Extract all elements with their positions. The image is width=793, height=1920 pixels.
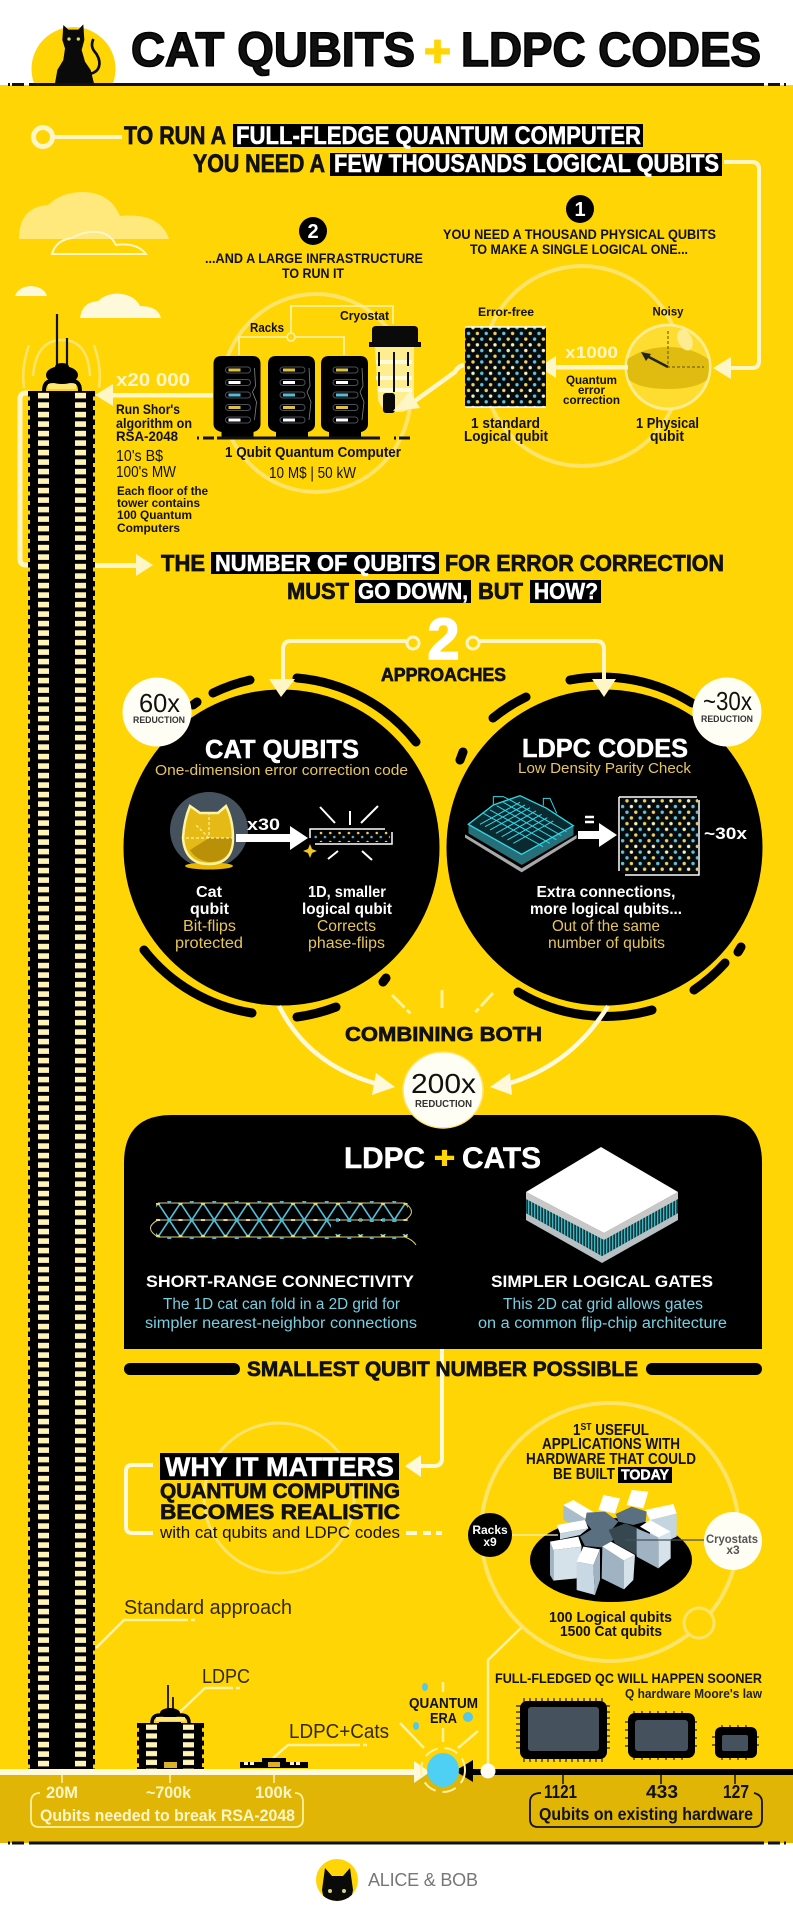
tower notes: Run Shor's bbox=[116, 401, 180, 417]
heading: intro: FEW THOUSANDS LOGICAL QUBITS bbox=[334, 150, 719, 178]
callout: standard approach bbox=[96, 1597, 292, 1648]
badge: 60x: 60x bbox=[139, 688, 180, 718]
heading: question: THE bbox=[161, 550, 205, 576]
text: simpler logical gates: on a common flip-chip architecture bbox=[478, 1315, 727, 1332]
computer caption: 10 M$ | 50 kW bbox=[269, 465, 357, 482]
title: CAT QUBITS bbox=[131, 24, 415, 77]
hardware caption bbox=[549, 1609, 672, 1640]
2 approaches: 2 bbox=[427, 607, 460, 672]
outlined cloud bbox=[52, 232, 146, 254]
badge: 200x: REDUCTION bbox=[415, 1099, 472, 1110]
heading: + bbox=[434, 1142, 455, 1175]
qubit count labels: ~700k bbox=[146, 1783, 192, 1802]
title: LDPC CODES bbox=[461, 24, 761, 77]
cat qubit caption: protected bbox=[175, 935, 243, 952]
full-fledged heading: FULL-FLEDGED QC WILL HAPPEN SOONER bbox=[495, 1670, 762, 1686]
graphic: flip-chip bbox=[526, 1147, 678, 1263]
why it matters bbox=[126, 1452, 442, 1542]
heading: question: FOR ERROR CORRECTION bbox=[445, 550, 724, 576]
text: short-range connectivity: simpler nearest-neighbor connections bbox=[145, 1315, 417, 1332]
footer logo: ALICE & BOB bbox=[368, 1870, 478, 1890]
text: short-range connectivity: The 1D cat can fold in a 2D grid for bbox=[163, 1296, 400, 1313]
building: LDPC tower bbox=[137, 1685, 204, 1769]
label: quantum error correction: correction bbox=[563, 393, 620, 407]
step 1 text: YOU NEED A THOUSAND PHYSICAL QUBITS bbox=[443, 227, 716, 242]
cat qubit caption: qubit bbox=[190, 901, 230, 918]
callout: LDPC bbox=[180, 1666, 250, 1712]
badge: 30x: REDUCTION bbox=[701, 714, 753, 725]
illustration: 9 rack hexagon array bbox=[512, 1490, 704, 1602]
callout: LDPC: LDPC bbox=[202, 1666, 250, 1688]
step 2 text: TO RUN IT bbox=[282, 266, 345, 281]
tower notes bbox=[116, 370, 208, 535]
computer caption: 1 Qubit Quantum Computer bbox=[225, 445, 401, 461]
badge: 60x: REDUCTION bbox=[133, 715, 185, 726]
cat qubit caption bbox=[175, 884, 243, 952]
title bbox=[131, 24, 761, 77]
heading: CATS bbox=[462, 1142, 541, 1175]
standard logical qubit: Logical qubit bbox=[464, 429, 548, 445]
badge: 30x: ~30x bbox=[703, 686, 752, 716]
step 2 text: 2 bbox=[307, 221, 319, 243]
arrow: x30 bbox=[236, 815, 308, 850]
panel: LDPC + Cats bbox=[124, 1115, 762, 1349]
heading: LDPC CODES bbox=[522, 733, 688, 763]
physical qubit: qubit bbox=[650, 429, 684, 445]
heading: question: BUT bbox=[478, 578, 523, 604]
computer caption bbox=[225, 445, 401, 482]
quantum era bbox=[400, 1682, 478, 1792]
badge: cryostats x3: Cryostats bbox=[706, 1532, 758, 1546]
arrow left bbox=[269, 637, 419, 697]
icon: 1D logical qubit bbox=[303, 806, 392, 860]
tower notes: Computers bbox=[117, 521, 180, 535]
LDPC caption bbox=[530, 884, 682, 952]
building: LDPC+Cats bbox=[240, 1758, 308, 1768]
arrow: x30: x30 bbox=[247, 815, 280, 834]
standard logical qubit: 1 standard bbox=[471, 416, 540, 432]
arrow: x1000 bbox=[539, 343, 628, 378]
label: quantum error correction bbox=[563, 373, 620, 407]
racks bbox=[197, 306, 410, 438]
left connector line bbox=[20, 393, 30, 565]
why it matters: QUANTUM COMPUTING bbox=[160, 1480, 400, 1503]
tower notes: algorithm on bbox=[116, 415, 192, 431]
title: + bbox=[424, 27, 451, 76]
heading: CAT QUBITS bbox=[205, 734, 359, 764]
badge: 60x bbox=[122, 678, 192, 746]
pale cloud bbox=[19, 192, 169, 239]
1st useful applications text: BE BUILT bbox=[553, 1466, 615, 1483]
pale circle: hardware bbox=[481, 1403, 739, 1661]
LDPC caption: number of qubits bbox=[548, 935, 665, 952]
icon: cat qubit bbox=[170, 792, 248, 870]
2 approaches: APPROACHES bbox=[381, 664, 506, 685]
subtitle: One-dimension error correction code bbox=[155, 763, 408, 779]
badge: cryostats x3 bbox=[704, 1512, 762, 1570]
badge: racks x9: x9 bbox=[483, 1535, 497, 1549]
arrow: logical qubit to computer bbox=[393, 365, 464, 411]
standard logical qubit bbox=[464, 305, 548, 445]
physical qubit bbox=[624, 306, 712, 444]
physical qubit: Noisy bbox=[652, 304, 684, 318]
arrow: equals bbox=[578, 817, 617, 847]
heading: question bbox=[161, 550, 724, 604]
why it matters: BECOMES REALISTIC bbox=[160, 1501, 400, 1524]
tower notes: Each floor of the bbox=[117, 484, 208, 498]
heading: question: GO DOWN, bbox=[358, 578, 468, 604]
tower notes: RSA-2048 bbox=[116, 428, 178, 444]
step 1 text: TO MAKE A SINGLE LOGICAL ONE... bbox=[470, 242, 688, 257]
badge: 200x bbox=[403, 1052, 483, 1128]
label: quantum error correction: error bbox=[578, 383, 605, 397]
hardware count labels: Qubits on existing hardware bbox=[539, 1804, 753, 1824]
heading: LDPC bbox=[344, 1142, 425, 1175]
LDPC caption: Out of the same bbox=[552, 918, 660, 935]
grid: logical qubits: ~30x bbox=[704, 824, 748, 843]
panel: LDPC codes bbox=[446, 677, 762, 1016]
heading: intro bbox=[34, 122, 722, 178]
hardware count labels: 1121 bbox=[544, 1782, 577, 1802]
heading: question: HOW? bbox=[534, 578, 598, 604]
text: short-range connectivity: SHORT-RANGE CONNECTIVITY bbox=[146, 1272, 415, 1291]
tower bbox=[23, 314, 100, 1772]
logical qubit caption bbox=[302, 884, 393, 952]
heading: intro: TO RUN A bbox=[124, 122, 226, 150]
physical qubit: 1 Physical bbox=[636, 416, 699, 432]
chip: 433 bbox=[625, 1711, 697, 1760]
step 2 text bbox=[205, 217, 423, 281]
text: simpler logical gates: This 2D cat grid allows gates bbox=[503, 1296, 703, 1313]
grid: logical qubits bbox=[619, 797, 748, 875]
logical qubit caption: phase-flips bbox=[308, 935, 385, 952]
hardware count labels bbox=[530, 1782, 762, 1827]
callout: standard approach: Standard approach bbox=[124, 1597, 292, 1619]
standard logical qubit: Error-free bbox=[478, 305, 534, 319]
small cloud bbox=[15, 286, 47, 296]
cryostat: Cryostat bbox=[340, 309, 390, 323]
LDPC caption: Extra connections, bbox=[536, 884, 676, 901]
1st useful applications text bbox=[526, 1422, 696, 1484]
callout: LDPC+Cats bbox=[273, 1721, 389, 1758]
tower notes: tower contains bbox=[117, 496, 200, 510]
racks: Racks bbox=[250, 321, 284, 335]
1st useful applications text: TODAY bbox=[621, 1468, 669, 1484]
step 1 text bbox=[443, 195, 716, 257]
label: combining both: COMBINING BOTH bbox=[345, 1023, 542, 1046]
cat qubit caption: Cat bbox=[196, 884, 223, 901]
header cat logo bbox=[32, 24, 116, 83]
1st useful applications text: APPLICATIONS WITH bbox=[542, 1436, 680, 1453]
pale circle: qubit bbox=[483, 266, 681, 466]
logical qubit caption: logical qubit bbox=[302, 901, 393, 918]
tower notes: 10's B$ bbox=[116, 448, 163, 465]
full-fledged heading bbox=[495, 1670, 763, 1701]
heading: question: MUST bbox=[287, 578, 349, 604]
text: short-range connectivity bbox=[145, 1272, 417, 1332]
qubit count labels: 100k bbox=[255, 1783, 293, 1802]
chip: 1121 bbox=[516, 1698, 610, 1762]
heading: intro: FULL-FLEDGE QUANTUM COMPUTER bbox=[236, 122, 641, 150]
hardware count labels: 127 bbox=[723, 1782, 749, 1802]
label: quantum error correction: Quantum bbox=[566, 373, 617, 387]
header rule bbox=[8, 83, 786, 86]
text: simpler logical gates bbox=[478, 1272, 727, 1332]
badge: racks x9 bbox=[468, 1513, 512, 1557]
arrow: computer to tower bbox=[95, 384, 213, 406]
arrow right bbox=[467, 637, 616, 697]
1st useful applications text: HARDWARE THAT COULD bbox=[526, 1451, 696, 1468]
white cloud bbox=[80, 294, 161, 318]
callout: LDPC+Cats: LDPC+Cats bbox=[289, 1721, 389, 1743]
text: simpler logical gates: SIMPLER LOGICAL GATES bbox=[491, 1272, 713, 1291]
line to why it matters bbox=[405, 1349, 442, 1477]
banner: smallest qubit number bbox=[124, 1358, 762, 1381]
badge: racks x9: Racks bbox=[472, 1523, 508, 1537]
tower notes: 100 Quantum bbox=[117, 508, 192, 522]
heading bbox=[344, 1142, 541, 1175]
pale circle: computer bbox=[221, 294, 411, 492]
timeline: hardware bbox=[455, 1628, 793, 1784]
arrow: tower to question bbox=[95, 554, 153, 576]
logical qubit caption: 1D, smaller bbox=[308, 884, 386, 901]
badge: 30x bbox=[692, 678, 762, 746]
step 1 text: 1 bbox=[574, 199, 586, 221]
graphic: short-range connectivity bbox=[150, 1201, 416, 1245]
darker bottom band bbox=[0, 1774, 793, 1843]
logical qubit caption: Corrects bbox=[317, 918, 376, 935]
1st useful applications text: ST bbox=[580, 1422, 592, 1433]
hardware count labels: 433 bbox=[646, 1782, 678, 1802]
quantum era: ERA bbox=[430, 1711, 457, 1727]
hardware caption: 100 Logical qubits bbox=[549, 1609, 672, 1626]
heading: intro: YOU NEED A bbox=[193, 150, 325, 178]
subtitle: Low Density Parity Check bbox=[518, 761, 692, 777]
why it matters: with cat qubits and LDPC codes bbox=[159, 1523, 400, 1542]
badge: cryostats x3: x3 bbox=[726, 1543, 740, 1557]
combining rays bbox=[392, 990, 493, 1017]
why it matters: WHY IT MATTERS bbox=[165, 1452, 394, 1482]
panel: cat qubits bbox=[124, 678, 440, 1017]
footer rule bbox=[8, 1842, 786, 1844]
step 2 text: ...AND A LARGE INFRASTRUCTURE bbox=[205, 251, 423, 266]
full-fledged heading: Q hardware Moore's law bbox=[625, 1686, 763, 1701]
pale circle: why bbox=[204, 1423, 354, 1573]
timeline: qubits needed bbox=[0, 1761, 430, 1783]
hardware caption: 1500 Cat qubits bbox=[560, 1623, 662, 1640]
tower notes: 100's MW bbox=[116, 464, 177, 481]
badge: 200x: 200x bbox=[411, 1068, 476, 1099]
banner: smallest qubit number: SMALLEST QUBIT NUMBER POSSIBLE bbox=[247, 1358, 638, 1381]
footer logo bbox=[316, 1859, 478, 1905]
chip: 127 bbox=[712, 1725, 759, 1760]
2 approaches bbox=[269, 607, 616, 697]
1st useful applications text: USEFUL bbox=[592, 1422, 649, 1439]
heading: question: NUMBER OF QUBITS bbox=[215, 550, 436, 576]
cat qubit caption: Bit-flips bbox=[183, 918, 236, 935]
quantum era: QUANTUM bbox=[409, 1696, 478, 1712]
1st useful applications text: 1 bbox=[573, 1422, 582, 1439]
arrow: heading to physical qubit bbox=[713, 162, 759, 379]
qubit count labels: 20M bbox=[46, 1783, 78, 1802]
key ring connector bbox=[34, 128, 122, 146]
qubit count labels: Qubits needed to break RSA-2048 bbox=[40, 1806, 295, 1825]
arrows to 200x bbox=[279, 1006, 608, 1095]
arrow: x1000: x1000 bbox=[565, 343, 618, 362]
tower notes: x20 000 bbox=[116, 370, 190, 390]
LDPC caption: more logical qubits... bbox=[530, 901, 682, 918]
cryostat bbox=[340, 309, 421, 413]
qubit count labels bbox=[31, 1783, 303, 1827]
icon: LDPC chip bbox=[465, 796, 577, 872]
